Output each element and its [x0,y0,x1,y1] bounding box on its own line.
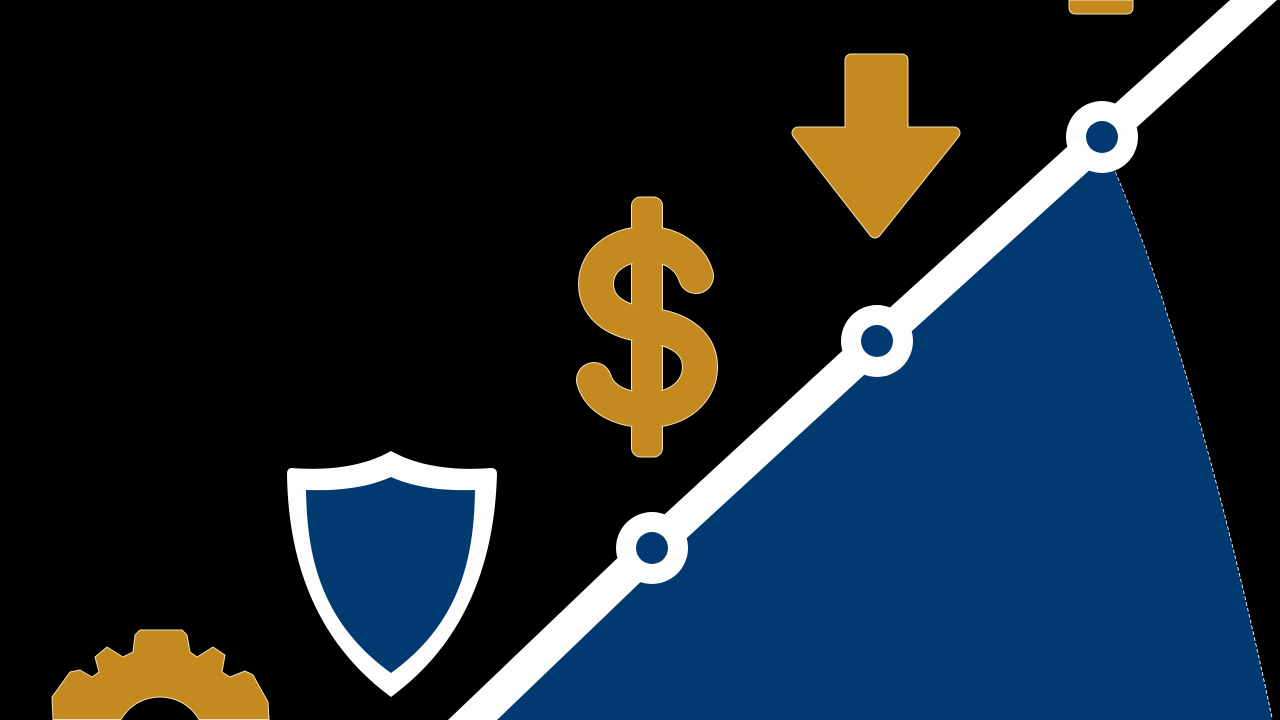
growth line [448,0,1277,720]
line marker 1 [616,512,688,584]
line marker 2 [841,305,913,377]
icon: partial gold shape at top edge [1069,0,1133,14]
line marker 3 [1066,101,1138,173]
icon: down arrow [798,60,954,232]
icon: shield [287,451,497,697]
icon: dollar sign [594,197,700,457]
icon: gear [52,630,269,720]
area under the growth line [478,137,1272,720]
